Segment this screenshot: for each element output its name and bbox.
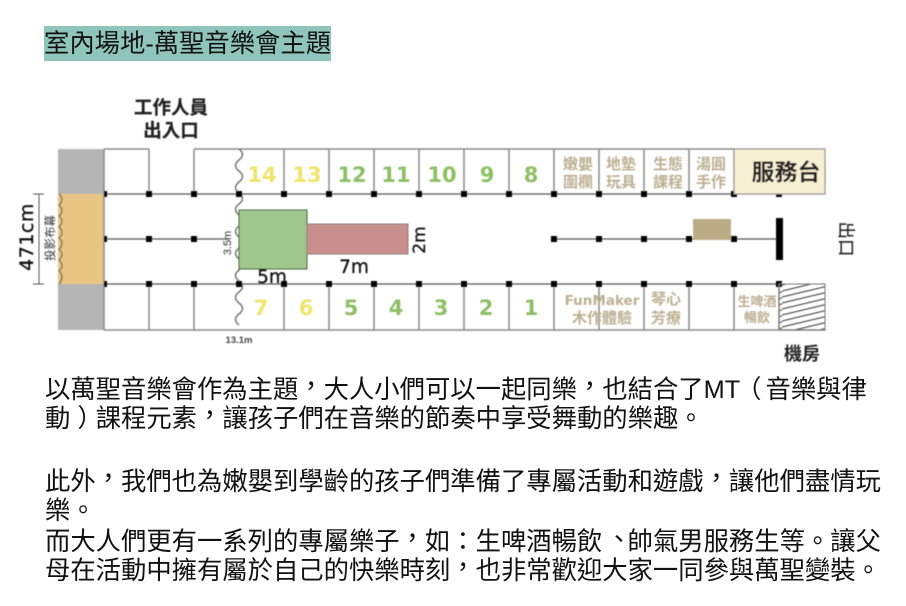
staff entrance label: 出入口 xyxy=(143,120,199,141)
top booth numbers: 11 xyxy=(381,163,411,187)
exit bar xyxy=(776,218,783,260)
activity booth labels: 課程 xyxy=(653,173,683,191)
booth grid lines xyxy=(104,149,825,330)
paragraph: adult activities: 而大人們更有一系列的專屬樂子，如：生啤酒暢飲、帥氣男服務生等。讓父 xyxy=(45,525,881,556)
activity booth labels xyxy=(563,156,777,327)
bottom booth numbers: 4 xyxy=(389,296,403,320)
wavy divider xyxy=(236,149,242,325)
post nodes xyxy=(104,191,782,287)
exit label: 出口 xyxy=(836,222,856,256)
activity booth labels: 琴心 xyxy=(651,291,681,308)
top booth numbers: 9 xyxy=(480,163,494,187)
paragraph: kids activities: 樂。 xyxy=(45,497,96,525)
dimension 13.1m: 13.1m xyxy=(226,335,252,346)
top booth numbers: 14 xyxy=(247,163,277,187)
projection curtain wave xyxy=(59,194,62,284)
paragraph: adult activities xyxy=(45,525,881,585)
title: 室內場地-萬聖音樂會主題 xyxy=(44,30,331,58)
staff entrance label xyxy=(134,97,208,141)
machine room label: 機房 xyxy=(784,344,820,364)
top booth numbers: 13 xyxy=(292,163,322,187)
bottom booth numbers: 1 xyxy=(524,296,538,320)
stage orange area xyxy=(58,194,104,284)
dimension 3.5m: 3.5m xyxy=(222,231,234,255)
activity booth labels: 生態 xyxy=(653,156,683,173)
service desk: 服務台 xyxy=(752,159,820,185)
staff entrance label: 工作人員 xyxy=(134,97,208,118)
paragraph: theme intro: 以萬聖音樂會作為主題，大人小們可以一起同樂，也結合了MT（音樂與律 xyxy=(45,373,867,404)
activity booth labels: 嫩嬰 xyxy=(563,156,593,173)
width dimension 471cm xyxy=(16,194,44,284)
projection screen label: 投影布幕 xyxy=(43,215,57,261)
activity booth labels: 圍欄 xyxy=(563,174,593,191)
green stage platform xyxy=(239,210,307,269)
activity booth labels: 玩具 xyxy=(606,174,636,191)
bottom booth numbers: 5 xyxy=(344,296,358,320)
activity booth labels: 生啤酒 xyxy=(737,294,777,309)
bottom booth numbers: 2 xyxy=(479,296,493,320)
tan table xyxy=(693,219,731,240)
grey wall block xyxy=(58,149,104,330)
floor plan diagram xyxy=(16,97,856,364)
paragraph: kids activities xyxy=(45,465,881,525)
dimension 2m: 2m xyxy=(410,226,430,254)
paragraph: kids activities: 此外，我們也為嫩嬰到學齡的孩子們準備了專屬活動和遊戲，讓他們盡情玩 xyxy=(45,465,881,496)
paragraph: theme intro: 動 ）課程元素，讓孩子們在音樂的節奏中享受舞動的樂趣。 xyxy=(45,402,704,433)
paragraph: adult activities: 母在活動中擁有屬於自己的快樂時刻，也非常歡迎大家一同參與萬聖變裝。 xyxy=(45,554,881,585)
activity booth labels: 地墊 xyxy=(606,156,636,173)
activity booth labels: 芳療 xyxy=(651,309,681,327)
machine room hatch xyxy=(779,284,825,330)
activity booth labels: 暢飲 xyxy=(744,310,770,325)
paragraph: theme intro xyxy=(45,373,867,433)
red runway xyxy=(307,224,408,254)
bottom booth numbers: 3 xyxy=(434,296,448,320)
dimension 7m: 7m xyxy=(339,257,369,278)
activity booth labels: 湯圓 xyxy=(696,156,726,173)
width dimension 471cm: 471cm xyxy=(16,203,38,271)
top booth numbers: 12 xyxy=(337,163,367,187)
bottom booth numbers: 7 xyxy=(254,296,268,320)
activity booth labels: 手作 xyxy=(696,174,726,191)
dimension 5m: 5m xyxy=(257,267,287,288)
bottom booth numbers: 6 xyxy=(299,296,313,320)
activity booth labels: 木作體驗 xyxy=(572,309,632,327)
service desk xyxy=(734,149,825,194)
top booth numbers: 10 xyxy=(427,163,457,187)
activity booth labels: FunMaker xyxy=(565,293,640,309)
bottom booth numbers xyxy=(254,296,538,320)
top booth numbers xyxy=(247,163,538,187)
top booth numbers: 8 xyxy=(524,163,538,187)
